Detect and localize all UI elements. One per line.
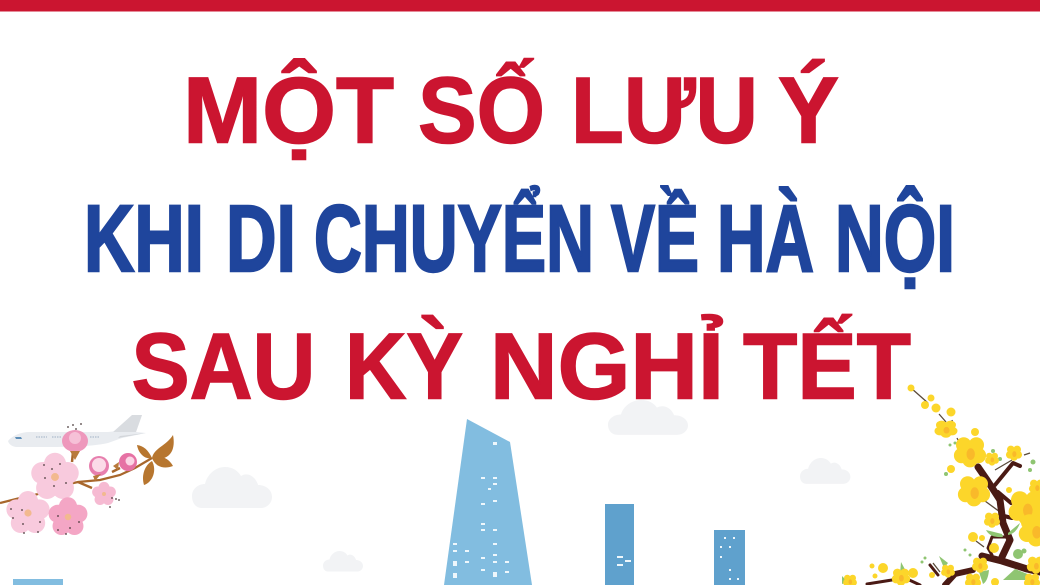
illustration: pink blossom branch [0, 423, 174, 535]
dark branches [867, 463, 1040, 585]
thin twigs [911, 388, 1030, 572]
stamens [10, 423, 120, 535]
title line 2: KHI [84, 186, 204, 292]
title line 3: NGHỈ [490, 314, 724, 418]
middle building [605, 504, 634, 585]
title line 2: VỀ [611, 186, 699, 292]
blossoms [6, 453, 116, 535]
green leaves [842, 442, 1036, 584]
leaves [137, 435, 174, 485]
title [84, 58, 955, 418]
title line 1: LƯU [571, 58, 758, 162]
title line 2 [84, 186, 955, 292]
skyline buildings [13, 419, 745, 585]
title line 2: NỘI [835, 186, 955, 292]
icon: airplane [8, 415, 146, 447]
title line 2: DI [226, 186, 296, 292]
title line 3: KỲ [345, 314, 463, 418]
title line 1: Ý [778, 58, 839, 162]
title line 3: TẾT [743, 314, 911, 418]
title line 2: HÀ [717, 186, 814, 292]
tall tilted tower [444, 419, 532, 585]
top red bar [0, 0, 1040, 12]
small left building [13, 579, 63, 585]
title line 1: SỐ [418, 58, 545, 162]
clouds [192, 400, 850, 572]
title line 1: MỘT [183, 58, 394, 162]
title line 3: SAU [132, 314, 316, 418]
illustration: yellow apricot blossom branch [842, 384, 1040, 585]
title line 2: CHUYỂN [314, 186, 594, 292]
title line 1 [183, 58, 839, 162]
buds [62, 430, 137, 481]
branch [0, 458, 152, 503]
right building [714, 530, 745, 585]
yellow flowers [843, 384, 1040, 585]
title line 3 [132, 314, 911, 418]
